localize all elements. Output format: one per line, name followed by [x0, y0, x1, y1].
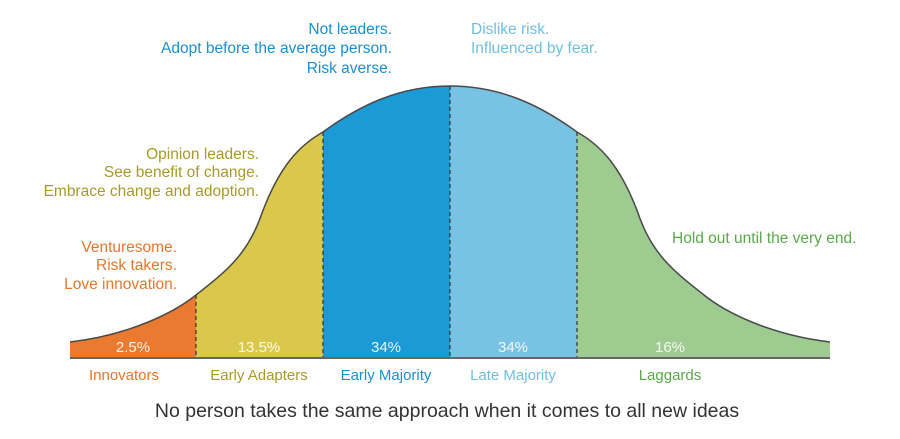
text: innovators: Risk takers. — [96, 257, 177, 274]
text: innovators: Love innovation. — [64, 276, 177, 293]
text: early majority — [161, 21, 392, 77]
text: innovators: Venturesome. — [81, 239, 177, 256]
bell curve chart — [70, 80, 830, 360]
text: laggards: Hold out until the very end. — [672, 230, 856, 247]
text: early majority: Not leaders. — [308, 21, 392, 38]
text: early adapters: Embrace change and adoption. — [44, 183, 259, 200]
text: late majority — [471, 21, 598, 57]
text: early adapters: See benefit of change. — [104, 164, 259, 181]
category labels: Late Majority — [470, 367, 556, 384]
text: early adapters: Opinion leaders. — [146, 146, 259, 163]
percentages: 16% — [655, 339, 685, 356]
category labels — [89, 367, 701, 384]
category labels: Innovators — [89, 367, 159, 384]
category labels: Early Majority — [341, 367, 432, 384]
percentages — [116, 339, 685, 356]
percentages: 2.5% — [116, 339, 150, 356]
percentages: 13.5% — [238, 339, 280, 356]
percentages: 34% — [498, 339, 528, 356]
text: early adapters — [44, 146, 259, 200]
text: innovators — [64, 239, 177, 293]
text: early majority: Adopt before the average person. — [161, 40, 392, 57]
text: late majority: Dislike risk. — [471, 21, 549, 38]
text: early majority: Risk averse. — [307, 60, 392, 77]
text: late majority: Influenced by fear. — [471, 40, 598, 57]
caption: No person takes the same approach when it comes to all new ideas — [155, 400, 739, 422]
category labels: Laggards — [639, 367, 701, 384]
percentages: 34% — [371, 339, 401, 356]
category labels: Early Adapters — [210, 367, 308, 384]
